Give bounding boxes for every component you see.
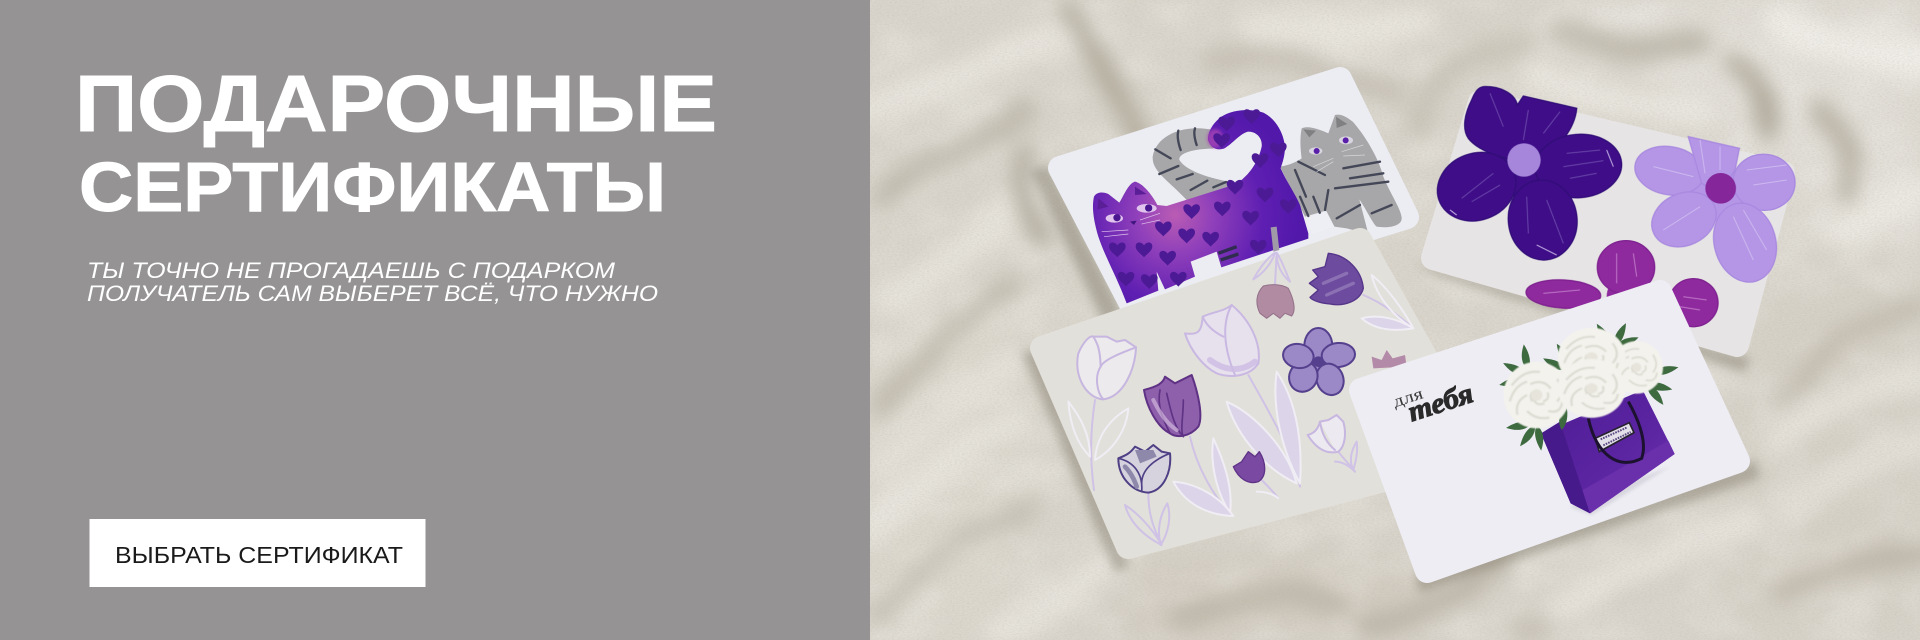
- magenta flower: [1525, 241, 1720, 329]
- pink sprout: [1372, 350, 1407, 368]
- button: choose certificate: [90, 519, 426, 587]
- caption: for you: тебя: [1404, 377, 1477, 428]
- title: СЕРТИФИКАТЫ: [79, 148, 666, 226]
- purple cat: [1093, 109, 1308, 303]
- grey cat: [1280, 115, 1402, 234]
- stems and white leaves: [1091, 253, 1413, 543]
- white peonies: [1503, 328, 1663, 428]
- card: tulips: [1042, 240, 1480, 547]
- subtitle text: ТЫ ТОЧНО НЕ ПРОГАДАЕШЬ С ПОДАРКОМ: [87, 258, 616, 283]
- tulip purple: [1144, 375, 1200, 437]
- card shadows: [1022, 165, 1760, 592]
- panel: linen fabric photo: [860, 0, 1920, 640]
- gift bag: [1541, 390, 1675, 515]
- panel: left grey background: [0, 0, 870, 640]
- card: cats: [1060, 79, 1407, 304]
- small purple tulip: [1233, 452, 1265, 483]
- tulip outlined 1: [1077, 336, 1136, 399]
- dark purple flower: [1428, 87, 1624, 263]
- dark purple tulip: [1309, 253, 1363, 305]
- lilac flower: [1631, 137, 1797, 289]
- button: choose certificate: ВЫБРАТЬ СЕРТИФИКАТ: [115, 542, 403, 568]
- five-petal flower: [1281, 328, 1356, 399]
- tulip dark outline: [1118, 445, 1170, 493]
- grey tail: [1153, 128, 1240, 200]
- title: [75, 59, 717, 226]
- tulip big pale: [1185, 305, 1259, 376]
- leaves: [1498, 321, 1679, 451]
- caption: for you: для: [1390, 383, 1426, 411]
- card: for you with bouquet: [1361, 292, 1738, 571]
- subtitle text: ПОЛУЧАТЕЛЬ САМ ВЫБЕРЕТ ВСЁ, ЧТО НУЖНО: [87, 281, 658, 306]
- card: big flowers: [1428, 87, 1797, 345]
- title: ПОДАРОЧНЫЕ: [75, 59, 717, 148]
- subtitle text: [87, 258, 658, 306]
- upside-down dusky tulip: [1257, 285, 1294, 318]
- white foot gaps: [1305, 212, 1334, 234]
- small pale tulip: [1308, 415, 1345, 452]
